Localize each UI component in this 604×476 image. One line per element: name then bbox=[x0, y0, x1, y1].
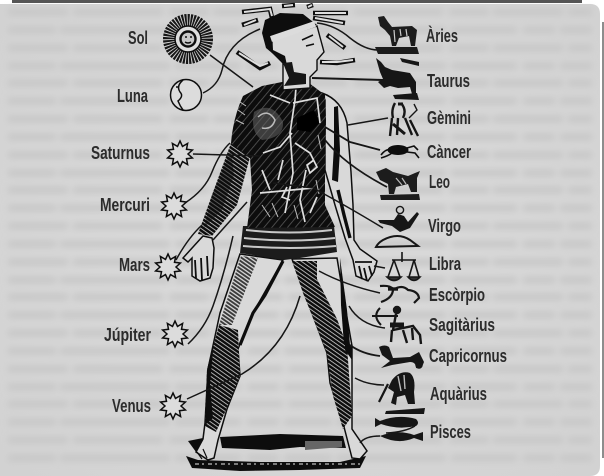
label Júpiter: Júpiter bbox=[104, 325, 151, 345]
icon: star Mercuri bbox=[162, 193, 186, 219]
icon: Aries ram bbox=[375, 16, 419, 54]
label Escòrpio: Escòrpio bbox=[429, 285, 485, 305]
label Taurus: Taurus bbox=[427, 71, 470, 91]
icon: Sagittarius archer bbox=[372, 307, 421, 344]
label Gèmini: Gèmini bbox=[427, 108, 471, 128]
label Sagitàrius: Sagitàrius bbox=[429, 315, 495, 335]
torso with veins bbox=[231, 75, 335, 228]
icon: Leo lion bbox=[376, 168, 420, 200]
label Mercuri: Mercuri bbox=[100, 195, 150, 215]
right leg bbox=[292, 258, 367, 459]
label Sol: Sol bbox=[128, 28, 148, 48]
label Luna: Luna bbox=[117, 86, 149, 106]
left arm bbox=[183, 143, 250, 281]
right arm bbox=[322, 93, 377, 281]
human figure bbox=[183, 5, 377, 471]
icon: Capricorn bbox=[379, 346, 424, 368]
label Aquàrius: Aquàrius bbox=[430, 384, 487, 404]
icon: Pisces fishes bbox=[375, 417, 423, 441]
label Virgo: Virgo bbox=[428, 216, 461, 236]
icon: star Saturnus bbox=[168, 141, 192, 167]
icon: sun bbox=[169, 20, 207, 58]
label Venus: Venus bbox=[112, 396, 151, 416]
label Àries: Àries bbox=[426, 25, 458, 46]
connector lines bbox=[176, 23, 388, 443]
label Saturnus: Saturnus bbox=[91, 143, 150, 163]
icon: Gemini twins bbox=[390, 103, 418, 136]
left leg bbox=[196, 254, 283, 460]
label Pisces: Pisces bbox=[430, 422, 471, 442]
labels: planets bbox=[91, 28, 151, 416]
icon: star Venus bbox=[161, 393, 185, 419]
icon: moon bbox=[170, 80, 202, 110]
icon: star Jupiter bbox=[163, 321, 187, 347]
label Leo: Leo bbox=[429, 172, 450, 192]
icon: Libra scales bbox=[387, 252, 420, 280]
icon: Aquarius bbox=[379, 372, 425, 414]
label Mars: Mars bbox=[119, 255, 150, 275]
flames around head bbox=[237, 5, 355, 68]
label Càncer: Càncer bbox=[427, 142, 471, 162]
icon: Taurus bull bbox=[376, 58, 419, 100]
icon: Virgo figure bbox=[376, 206, 419, 247]
icon: star Mars bbox=[156, 254, 180, 280]
icon: Cancer crab bbox=[381, 146, 419, 158]
labels: zodiac signs bbox=[426, 25, 507, 442]
head bbox=[262, 13, 324, 90]
waist cloth bbox=[240, 226, 337, 260]
label Capricornus: Capricornus bbox=[429, 346, 507, 366]
ground base bbox=[186, 434, 366, 471]
label Libra: Libra bbox=[429, 254, 462, 274]
icon: Scorpio bbox=[380, 286, 419, 303]
